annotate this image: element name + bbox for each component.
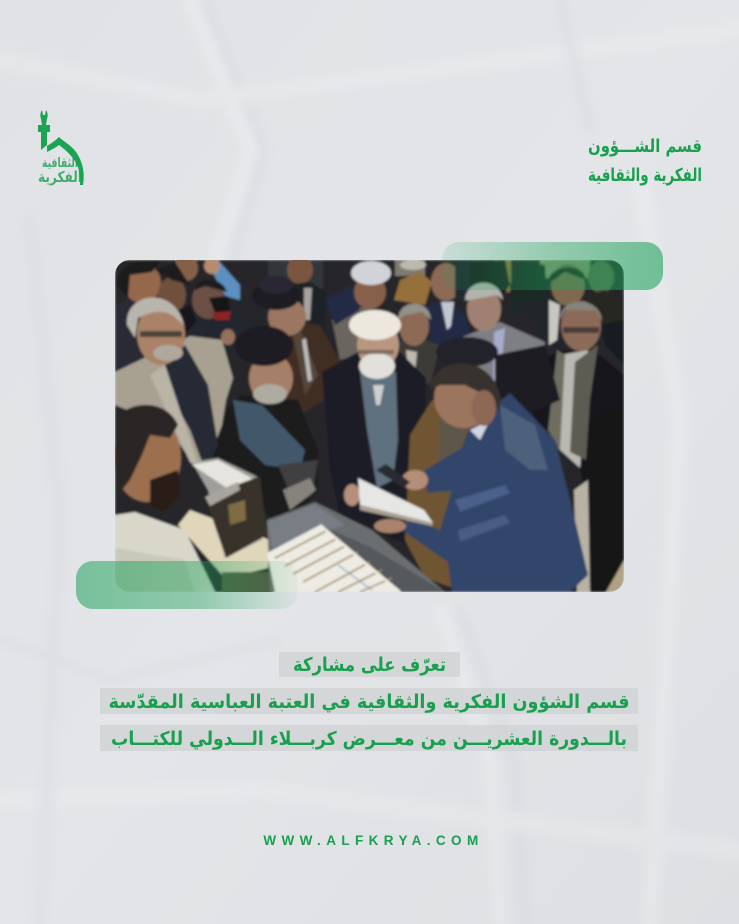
heading line 3: بالـــدورة العشريـــن من معـــرض كربـــلاء الـــدولي للكتـــاب (111, 728, 627, 750)
header: department name: الفكرية والثقافية (588, 165, 702, 186)
website address: WWW.ALFKRYA.COM (263, 833, 484, 848)
left top man (116, 300, 142, 369)
central old cleric (322, 348, 426, 545)
microphone (376, 464, 410, 488)
heading line 2: قسم الشؤون الفكرية والثقافية في العتبة العباسية المقدّسة (108, 691, 630, 713)
front man (115, 512, 215, 592)
far right dark figure (590, 480, 624, 592)
back row (268, 260, 324, 289)
black turban man behind (286, 322, 340, 412)
front black turban man (212, 395, 318, 520)
blue suit man (402, 393, 588, 592)
dark right men (510, 295, 590, 350)
green pill: bottom left (76, 561, 298, 609)
hand of cleric (344, 484, 360, 506)
logo: minaret and dome: الثقافية (42, 156, 78, 171)
white turban back man (332, 306, 398, 360)
second man (158, 277, 186, 313)
display case one (178, 510, 270, 578)
scarf man (532, 350, 624, 480)
header: department name: قسم الشـــؤون (588, 136, 702, 157)
navy suit man (426, 302, 470, 345)
tan robe (394, 272, 432, 305)
display case two (267, 502, 445, 592)
logo: minaret and dome (38, 110, 84, 186)
grey man glasses (462, 320, 546, 383)
logo: minaret and dome: الفكرية (38, 168, 82, 186)
book held (358, 478, 433, 523)
heading line 1: تعرّف على مشاركة (293, 654, 446, 676)
photo: visitors around the book display (113, 255, 624, 594)
brown robe (405, 400, 470, 592)
masked man (186, 321, 198, 336)
header: department name (588, 136, 702, 186)
beige jacket man (115, 336, 233, 470)
head K (400, 340, 439, 384)
green pill: top right (442, 242, 663, 290)
